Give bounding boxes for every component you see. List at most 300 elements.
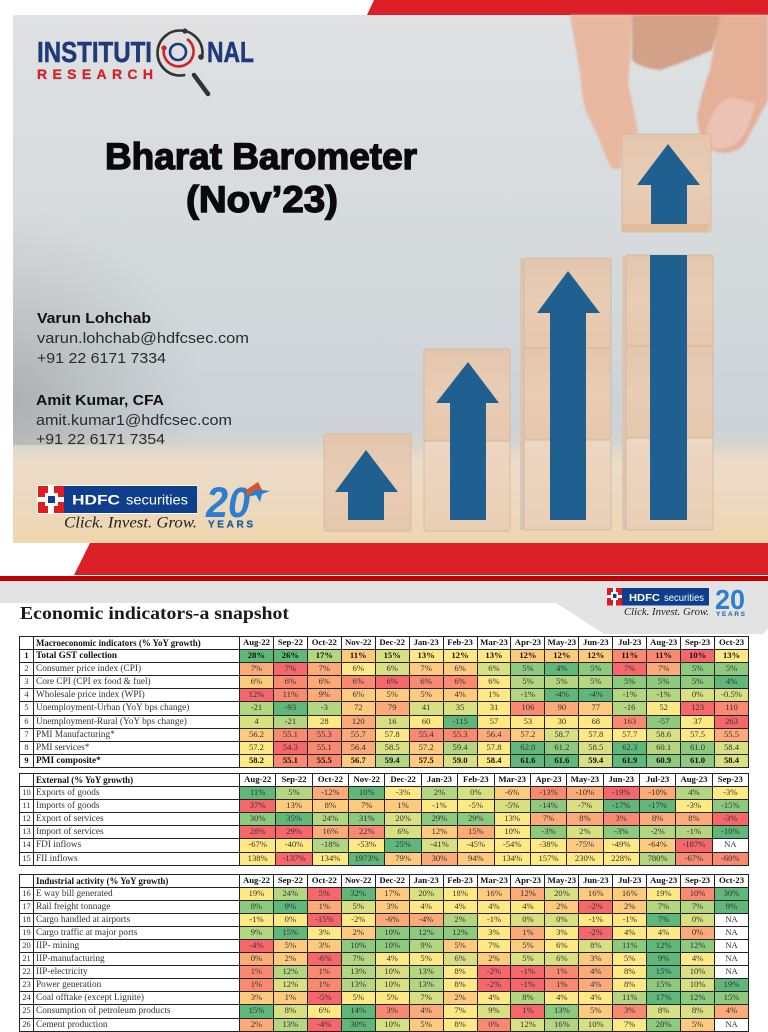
row 2: 6% — [488, 663, 500, 673]
row 13: 6% — [397, 826, 409, 836]
row 16: 16% — [588, 888, 604, 898]
row 10: 2% — [434, 787, 445, 797]
row 22: -2% — [487, 966, 501, 976]
row 20: 5% — [454, 940, 466, 950]
row 17: -2% — [589, 901, 603, 911]
row 8: 58.5 — [385, 742, 400, 752]
row 22: IIP-electricity — [36, 967, 88, 977]
row 9: 57.5 — [419, 755, 434, 765]
row 15: -60% — [721, 853, 740, 863]
row 1: 11% — [655, 650, 672, 660]
row 26: 5% — [420, 1019, 432, 1029]
row 21: 4% — [386, 953, 398, 963]
row 13: 29% — [286, 826, 302, 836]
row 15: 780% — [648, 853, 668, 863]
row 9: 61.6 — [554, 755, 569, 765]
row 2: 6% — [454, 663, 466, 673]
header row: Nov-22 — [345, 637, 372, 647]
header row: Oct-22 — [312, 637, 337, 647]
header row: May-23 — [548, 637, 576, 647]
header row: Jun-23 — [608, 774, 634, 784]
row 11: -3% — [687, 800, 701, 810]
row 24: 7% — [420, 992, 432, 1002]
row 19: 9% — [251, 927, 262, 937]
row 13: 22% — [359, 826, 375, 836]
row 26: 10% — [384, 1019, 400, 1029]
row 17: 4% — [488, 901, 500, 911]
row 6: 57 — [490, 716, 498, 726]
row 14: -18% — [321, 839, 340, 849]
row 17: 1% — [319, 901, 330, 911]
row 15 — [19, 853, 748, 866]
row 20: 6% — [556, 940, 568, 950]
row 26 — [19, 1019, 748, 1032]
row 3: 6% — [488, 676, 500, 686]
row 15: 79% — [395, 853, 411, 863]
row 3: 5% — [590, 676, 602, 686]
row 22 — [19, 966, 748, 979]
row 7: 56.4 — [486, 729, 502, 739]
row 9: 61.6 — [520, 755, 535, 765]
row 23: 10% — [690, 979, 705, 989]
row 3: 6% — [285, 676, 296, 686]
row 19: 15% — [282, 927, 298, 937]
row 13: 12% — [432, 826, 447, 836]
row 26: 16% — [554, 1019, 570, 1029]
row 20: 3% — [319, 940, 330, 950]
block stack 3 with tall arrow — [520, 258, 611, 530]
row 15: 138% — [248, 853, 268, 863]
row 14: -53% — [357, 839, 376, 849]
row 17: 4% — [454, 901, 466, 911]
row 2: 7% — [251, 663, 262, 673]
row 14: -64% — [648, 839, 667, 849]
row 10: 10% — [359, 787, 375, 797]
row 19: 3% — [556, 927, 568, 937]
row 13 — [19, 826, 748, 839]
row 3: 5% — [522, 676, 534, 686]
row 12: 13% — [504, 813, 520, 823]
row 17: 2% — [556, 901, 568, 911]
row 6: 120 — [352, 716, 365, 726]
row 1: 28% — [248, 650, 265, 660]
row 6: 263 — [725, 716, 738, 726]
logo: Institutional Research — [37, 28, 254, 94]
row 5: 110 — [725, 702, 738, 712]
row 8: 62.3 — [622, 742, 637, 752]
row 18: -4% — [419, 914, 433, 924]
row 26: 13% — [282, 1019, 298, 1029]
row 18: -1% — [589, 914, 603, 924]
row 10: 10 — [22, 788, 31, 797]
row 26: 10% — [588, 1019, 604, 1029]
header row: Apr-23 — [515, 637, 541, 647]
row 2: 7% — [658, 663, 669, 673]
row 7: 55.7 — [351, 729, 366, 739]
small HDFC securities logo: Click. Invest. Grow. — [624, 607, 709, 618]
row 13: -3% — [614, 826, 628, 836]
row 21: 9% — [658, 953, 669, 963]
row 16: 16% — [486, 888, 502, 898]
row 19: 12% — [418, 927, 434, 937]
row 10: -10% — [576, 787, 594, 797]
author: Varun Lohchab: varun.lohchab@hdfcsec.com — [37, 331, 249, 347]
title: (Nov’23) — [186, 178, 338, 220]
row 15: 157% — [538, 853, 559, 863]
row 25: 15% — [249, 1005, 264, 1015]
row 24: 8% — [522, 992, 534, 1002]
row 1: 12% — [519, 650, 537, 660]
row 2: 7% — [420, 663, 432, 673]
row 16: E way bill generated — [36, 889, 113, 899]
row 20: 12% — [656, 940, 672, 950]
row 18: 18 — [22, 915, 31, 924]
row 4: 11% — [283, 689, 298, 699]
row 7: 58.6 — [656, 729, 671, 739]
row 23: 8% — [624, 979, 635, 989]
row 23: -1% — [521, 979, 535, 989]
row 17: 8% — [251, 901, 262, 911]
row 24: 5% — [353, 992, 364, 1002]
author: Varun Lohchab — [37, 311, 249, 367]
row 12: 29% — [468, 813, 484, 823]
row 25: 1% — [522, 1005, 534, 1015]
row 13: 28% — [250, 826, 266, 836]
row 11: -14% — [539, 800, 558, 810]
row 10: -3% — [723, 787, 737, 797]
logo: Institutional Research: NAL — [207, 37, 254, 69]
row 19: 4% — [658, 927, 669, 937]
row 22: 10% — [690, 966, 705, 976]
row 22: 15% — [656, 966, 672, 976]
row 8: 58.4 — [724, 742, 739, 752]
row 15: 94% — [468, 853, 484, 863]
row 25: 14% — [350, 1005, 366, 1015]
row 18: -1% — [249, 914, 264, 924]
row 4: 1% — [488, 689, 500, 699]
block stack 1 with short arrow — [324, 434, 411, 531]
row 23: Power generation — [36, 980, 101, 990]
row 17: 2% — [624, 901, 635, 911]
row 25: Consumption of petroleum products — [36, 1006, 171, 1016]
row 19: 10% — [384, 927, 400, 937]
row 10: -13% — [539, 787, 558, 797]
row 4 — [19, 689, 748, 702]
row 26: 2% — [251, 1019, 262, 1029]
row 8: 61.2 — [554, 742, 569, 752]
row 22: 4% — [590, 966, 602, 976]
row 24: 24 — [22, 993, 31, 1002]
row 13: Import of services — [36, 827, 104, 837]
row 8: 55.1 — [317, 742, 332, 752]
row 26: 20% — [656, 1019, 672, 1029]
row 4: 4 — [24, 690, 29, 699]
dark red rule — [0, 576, 768, 581]
header row: Sep-23 — [718, 774, 743, 784]
row 18 — [19, 914, 748, 927]
grey header band — [0, 581, 768, 634]
header row: Macroeconomic indicators (% YoY growth) — [36, 638, 201, 648]
header row: Sep-22 — [278, 874, 303, 884]
row 4: -1% — [521, 689, 535, 699]
row 10: -3% — [396, 787, 410, 797]
row 25: 6% — [319, 1005, 330, 1015]
row 16: 5% — [319, 888, 330, 898]
row 14: -40% — [285, 839, 303, 849]
row 14: -187% — [682, 839, 705, 849]
row 1 — [19, 650, 748, 663]
header row: Feb-23 — [447, 637, 473, 647]
row 16: 18% — [452, 888, 468, 898]
row 4: -0.5% — [721, 689, 742, 699]
header row: Jun-23 — [583, 874, 609, 884]
row 24: 15% — [724, 992, 739, 1002]
header row: Oct-22 — [312, 874, 337, 884]
row 1: 12% — [587, 650, 604, 660]
row 17: 7% — [658, 901, 669, 911]
row 19: NA — [725, 927, 738, 937]
title — [105, 135, 417, 220]
row 25: 8% — [692, 1005, 703, 1015]
header row: Oct-22 — [318, 774, 343, 784]
heading: Economic indicators: Economic indicators-a snapshot — [20, 603, 289, 623]
row 15: FII inflows — [36, 854, 78, 864]
row 12: 29% — [432, 813, 447, 823]
row 23: 1% — [319, 979, 330, 989]
row 22: -1% — [521, 966, 535, 976]
row 24 — [19, 992, 748, 1005]
row 9: 58.4 — [486, 755, 502, 765]
row 23: 1% — [556, 979, 568, 989]
row 2: 7% — [319, 663, 330, 673]
row 7: 57.8 — [588, 729, 603, 739]
row 24: 1% — [285, 992, 296, 1002]
title: Bharat Barometer — [105, 135, 417, 177]
hand holding block — [570, 15, 768, 169]
row 25: 8% — [658, 1005, 669, 1015]
row 12 — [19, 813, 748, 826]
row 14: -49% — [612, 839, 631, 849]
row 24: 4% — [488, 992, 500, 1002]
row 26: 0% — [488, 1019, 500, 1029]
row 21: 5% — [420, 953, 432, 963]
row 21: 2% — [488, 953, 500, 963]
row 20: 10% — [384, 940, 400, 950]
row 17: 3% — [386, 901, 398, 911]
row 22: 13% — [350, 966, 366, 976]
row 8: 54.3 — [283, 742, 298, 752]
row 7: 57.8 — [385, 729, 400, 739]
row 6: Unemployment-Rural (YoY bps change) — [36, 717, 187, 727]
author: Amit Kumar: +91 22 6171 7354 — [36, 432, 165, 448]
row 12: -3% — [723, 813, 737, 823]
row 17: Rail freight tonnage — [36, 902, 110, 912]
row 9: 59.4 — [385, 755, 400, 765]
row 24: -5% — [317, 992, 331, 1002]
row 7 — [19, 729, 748, 742]
header row: Jan-23 — [427, 774, 452, 784]
row 13: 10% — [504, 826, 520, 836]
row 5: -21 — [251, 702, 262, 712]
header row: Jul-23 — [618, 637, 641, 647]
row 18: 0% — [692, 914, 703, 924]
row 11: 7% — [361, 800, 372, 810]
row 26: Cement production — [36, 1020, 108, 1030]
row 22: 8% — [624, 966, 635, 976]
row 8: PMI services* — [36, 743, 89, 753]
row 20: 10% — [350, 940, 366, 950]
row 13: 2% — [579, 826, 591, 836]
row 16: 32% — [350, 888, 366, 898]
row 12: 20% — [395, 813, 411, 823]
row 18: 2% — [454, 914, 466, 924]
row 2: 6% — [353, 663, 364, 673]
row 21: 5% — [624, 953, 635, 963]
header row: Aug-23 — [680, 774, 707, 784]
author: Varun Lohchab: Varun Lohchab — [37, 311, 151, 327]
row 7: 57.7 — [622, 729, 637, 739]
row 1: 1 — [24, 651, 29, 660]
row 4: 5% — [386, 689, 398, 699]
row 21 — [19, 953, 748, 966]
row 6: 60 — [422, 716, 430, 726]
row 14 — [19, 839, 748, 853]
header row: Dec-22 — [379, 874, 405, 884]
row 18: Cargo handled at airports — [36, 915, 130, 925]
row 1: 15% — [384, 650, 401, 660]
row 1: 10% — [689, 650, 706, 660]
row 20: 12% — [690, 940, 705, 950]
row 13: 15% — [468, 826, 484, 836]
logo: HDFC securities 20 years: 20 — [205, 479, 250, 527]
row 8: 56.4 — [351, 742, 366, 752]
row 7: 57.2 — [520, 729, 535, 739]
row 23: -2% — [487, 979, 501, 989]
row 18: 7% — [658, 914, 669, 924]
row 3: 5% — [658, 676, 669, 686]
row 15: 30% — [432, 853, 447, 863]
row 26: 8% — [454, 1019, 466, 1029]
row 5: 90 — [558, 702, 566, 712]
header row: Nov-22 — [353, 774, 380, 784]
row 16: 19% — [656, 888, 672, 898]
logo: Institutional Research: RESEARCH — [37, 66, 153, 82]
row 4: 0% — [692, 689, 703, 699]
row 5: -3 — [321, 702, 328, 712]
row 6: 28 — [320, 716, 329, 726]
row 3: 5% — [556, 676, 568, 686]
row 16: 20% — [554, 888, 570, 898]
row 1: 12% — [451, 650, 469, 660]
row 17: 7% — [692, 901, 703, 911]
row 2: 6% — [386, 663, 398, 673]
row 11: -17% — [612, 800, 631, 810]
row 4: -1% — [623, 689, 637, 699]
row 16: 16 — [22, 889, 31, 898]
small HDFC securities logo — [607, 584, 746, 618]
row 21: NA — [725, 953, 738, 963]
row 8: 60.1 — [656, 742, 671, 752]
row 7: 57.5 — [690, 729, 705, 739]
row 21: 3% — [590, 953, 602, 963]
table: macroeconomic indicators — [19, 636, 749, 768]
row 16: 12% — [520, 888, 536, 898]
row 2: 7% — [285, 663, 296, 673]
row 7: 55.4 — [419, 729, 434, 739]
row 23: 12% — [282, 979, 298, 989]
row 4: 12% — [249, 689, 264, 699]
row 25: 3% — [624, 1005, 635, 1015]
row 7: 58.7 — [554, 729, 569, 739]
row 3: 6% — [454, 676, 466, 686]
row 20: 20 — [22, 941, 31, 950]
row 25 — [19, 1005, 748, 1019]
row 25: 8% — [285, 1005, 296, 1015]
row 1: 11% — [621, 650, 638, 660]
author: Amit Kumar: amit.kumar1@hdfcsec.com — [36, 413, 232, 429]
row 10 — [19, 787, 748, 800]
row 5: 52 — [659, 702, 668, 712]
row 9: 59.0 — [453, 755, 468, 765]
header row: May-23 — [548, 874, 576, 884]
row 14: 14 — [22, 840, 31, 849]
row 20: 9% — [420, 940, 432, 950]
header row: Jul-23 — [646, 774, 669, 784]
small HDFC securities logo: HDFC — [629, 593, 660, 604]
row 26: 12% — [520, 1019, 536, 1029]
row 7: 55.3 — [317, 729, 332, 739]
row 16: 24% — [282, 888, 298, 898]
row 18: -2% — [351, 914, 365, 924]
row 14: -75% — [576, 839, 594, 849]
row 10: -19% — [612, 787, 631, 797]
row 8: 57.2 — [419, 742, 434, 752]
row 26: 30% — [350, 1019, 366, 1029]
row 21: 7% — [353, 953, 364, 963]
row 6: -21 — [285, 716, 296, 726]
row 3: 6% — [353, 676, 364, 686]
row 24: 4% — [556, 992, 568, 1002]
row 12: 31% — [359, 813, 375, 823]
row 21: IIP-manufacturing — [36, 954, 105, 964]
logo: Institutional Research: INSTITUTI — [37, 37, 152, 69]
row 8: 62.0 — [520, 742, 535, 752]
row 9: 55.1 — [283, 755, 298, 765]
row 5: 41 — [422, 702, 430, 712]
row 6: 30 — [558, 716, 566, 726]
row 18: 0% — [285, 914, 296, 924]
row 13: -2% — [650, 826, 665, 836]
header row: Dec-22 — [379, 637, 405, 647]
row 15: 228% — [611, 853, 631, 863]
row 19: 2% — [353, 927, 364, 937]
header row: Jan-23 — [414, 637, 439, 647]
row 12: Export of services — [36, 814, 104, 824]
row 19: 19 — [22, 928, 31, 937]
row 18: -1% — [623, 914, 637, 924]
row 10: -12% — [321, 787, 340, 797]
header row — [19, 874, 748, 888]
row 14: NA — [724, 839, 737, 849]
row 8: 8 — [24, 743, 29, 752]
row 4: -1% — [656, 689, 671, 699]
row 9 — [19, 755, 748, 768]
block stack 2 with medium arrow — [424, 349, 510, 531]
row 24: 5% — [386, 992, 398, 1002]
row 1: Total GST collection — [36, 651, 117, 661]
header row: Mar-23 — [498, 774, 526, 784]
block stack 4 with arrow shaft — [622, 255, 713, 530]
